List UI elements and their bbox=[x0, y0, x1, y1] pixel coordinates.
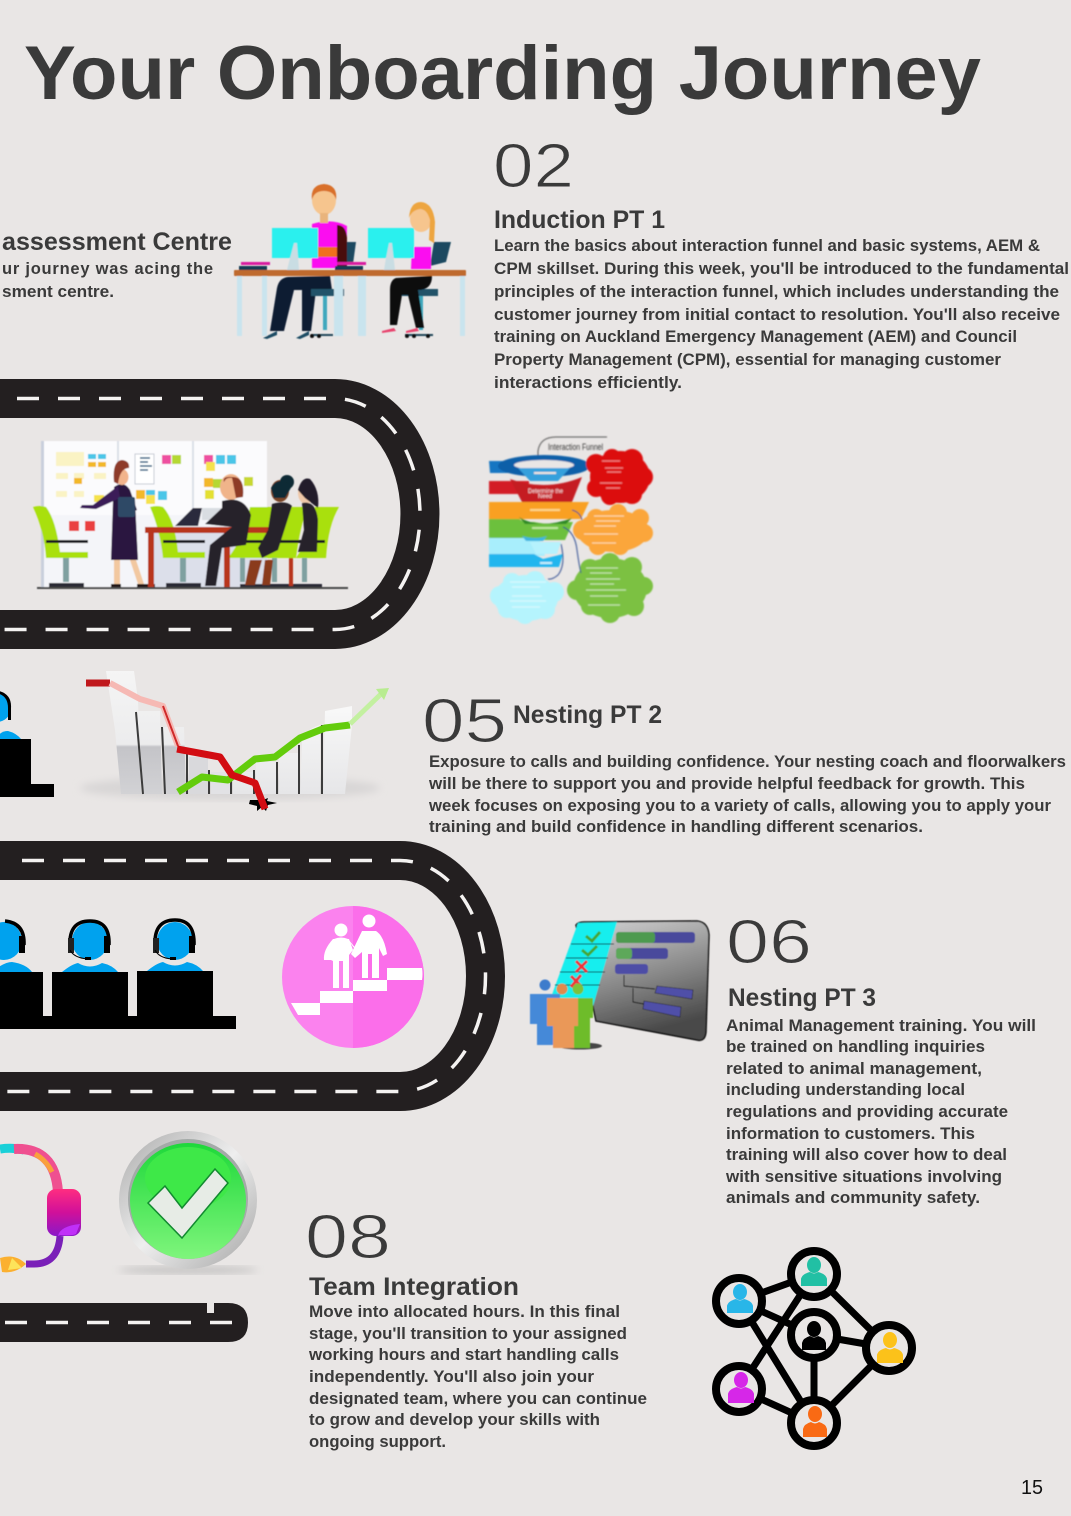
text block: induction PT 1: Learn the basics about interaction funnel and basic systems, AEM & bbox=[494, 236, 1040, 255]
text block: induction PT 1: training on Auckland Emergency Management (AEM) and Council bbox=[494, 327, 1017, 346]
floor line bbox=[37, 587, 348, 589]
funnel labels bbox=[528, 472, 564, 564]
green chairs bbox=[33, 506, 339, 558]
road: final stretch bbox=[0, 1303, 248, 1342]
shadow bbox=[80, 776, 380, 800]
text block: team integration: stage, you'll transition to your assigned bbox=[309, 1324, 627, 1343]
text block: nesting PT 2: Nesting PT 2 bbox=[513, 701, 662, 729]
desk top bbox=[234, 270, 466, 276]
green line bbox=[178, 688, 389, 792]
text block: team integration: independently. You'll also join your bbox=[309, 1367, 594, 1386]
agents row at desks bbox=[0, 920, 236, 1029]
text block: team integration: to grow and develop your skills with bbox=[309, 1410, 600, 1429]
icon: green check button bbox=[118, 1131, 258, 1274]
desks and monitors bbox=[0, 971, 236, 1029]
cloud: green bbox=[567, 553, 653, 623]
text block: induction PT 1: principles of the interaction funnel, which includes understanding the bbox=[494, 282, 1059, 301]
page number: 15 bbox=[1021, 1477, 1043, 1499]
road: second loop bbox=[0, 860, 486, 1092]
text block: nesting PT 3: related to animal management, bbox=[726, 1059, 982, 1078]
cloud: red bbox=[586, 449, 653, 505]
text block: induction PT 1: CPM skillset. During this week, you'll be introduced to the fundamental bbox=[494, 259, 1069, 278]
sticky notes bbox=[56, 452, 253, 531]
text block: nesting PT 3: Animal Management training. You will bbox=[726, 1016, 1036, 1035]
heading: nesting 3 number: 06 bbox=[726, 908, 812, 977]
text block: assessment centre: sment centre. bbox=[2, 282, 114, 301]
whiteboards bbox=[41, 441, 267, 587]
text block: induction PT 1: Induction PT 1 bbox=[494, 206, 665, 234]
text block: nesting PT 2 bbox=[428, 701, 1066, 836]
laptop bbox=[175, 508, 202, 526]
text block: nesting PT 3: Nesting PT 3 bbox=[728, 984, 876, 1012]
text block: assessment centre: assessment Centre bbox=[2, 228, 232, 256]
icon: people climbing steps bbox=[282, 906, 424, 1048]
cloud: orange bbox=[573, 504, 653, 555]
text block: induction PT 1: customer journey from initial contact to resolution. You'll also receive bbox=[494, 305, 1060, 324]
icon: gantt chart with checklist bbox=[530, 921, 709, 1050]
funnel labels: Determine the bbox=[528, 489, 564, 495]
text block: team integration: Move into allocated hours. In this final bbox=[309, 1302, 620, 1321]
people group bbox=[530, 980, 593, 1048]
checks and crosses bbox=[582, 932, 600, 955]
agent at left, first row bbox=[0, 690, 54, 797]
text block: induction PT 1: interactions efficiently. bbox=[494, 373, 682, 392]
text block: induction PT 1 bbox=[494, 206, 1069, 392]
bar gaps bbox=[136, 712, 322, 794]
bars bbox=[106, 671, 186, 794]
man bbox=[263, 184, 347, 339]
desk legs bbox=[237, 276, 465, 336]
funnel title: Interaction Funnel bbox=[548, 442, 603, 452]
chair backs bbox=[345, 242, 356, 264]
funnel title bbox=[538, 437, 607, 462]
books bbox=[239, 262, 366, 270]
road: first loop bbox=[0, 398, 420, 630]
funnel bands bbox=[489, 455, 590, 567]
agent 3 bbox=[147, 920, 203, 971]
text block: nesting PT 2: week focuses on exposing you to a variety of calls, allowing you to apply your bbox=[428, 796, 1051, 815]
illustration: interaction funnel bbox=[489, 437, 653, 624]
gantt bars bbox=[615, 932, 695, 1017]
cloud: light blue bbox=[490, 571, 564, 624]
illustration: two people at desks bbox=[234, 184, 466, 339]
illustration: meeting room bbox=[33, 441, 348, 589]
checklist bbox=[549, 922, 617, 1010]
text block: team integration: designated team, where you can continue bbox=[309, 1389, 647, 1408]
illustration: falling and rising bar chart bbox=[80, 671, 389, 811]
text block: nesting PT 3: information to customers. This bbox=[726, 1124, 975, 1143]
text block: assessment centre bbox=[2, 228, 232, 301]
text block: nesting PT 2: will be there to support you and provide helpful feedback for growth. This bbox=[428, 774, 1025, 793]
text block: nesting PT 3: animals and community safety. bbox=[726, 1188, 980, 1207]
text block: nesting PT 2: training and build confidence in handling different scenarios. bbox=[429, 817, 923, 836]
text block: nesting PT 3: with sensitive situations involving bbox=[725, 1167, 1002, 1186]
text block: team integration: working hours and start handling calls bbox=[308, 1345, 619, 1364]
text block: induction PT 1: Property Management (CPM), essential for managing customer bbox=[494, 350, 1001, 369]
text block: nesting PT 3: regulations and providing accurate bbox=[726, 1102, 1008, 1121]
icon: team network bbox=[716, 1251, 912, 1446]
heading: induction number: 02 bbox=[493, 132, 574, 201]
text block: team integration: Team Integration bbox=[309, 1273, 519, 1301]
agent 1 bbox=[0, 921, 32, 972]
agent 2 bbox=[62, 921, 118, 972]
seated colleagues bbox=[205, 474, 318, 586]
text block: team integration: ongoing support. bbox=[309, 1432, 446, 1451]
chair seats bbox=[311, 289, 344, 296]
text block: team integration bbox=[308, 1273, 647, 1451]
connector arrows bbox=[548, 510, 582, 579]
icon: colourful headset bbox=[0, 1148, 81, 1272]
chair bases bbox=[49, 558, 322, 588]
heading: team integration number: 08 bbox=[305, 1203, 391, 1272]
text block: nesting PT 2: Exposure to calls and building confidence. Your nesting coach and floorwalkers bbox=[429, 752, 1066, 771]
funnel labels: Need bbox=[538, 494, 552, 500]
text block: assessment centre: ur journey was acing the bbox=[2, 260, 213, 278]
text block: nesting PT 3: be trained on handling inquiries bbox=[726, 1037, 985, 1056]
text block: nesting PT 3: including understanding local bbox=[726, 1080, 965, 1099]
text block: nesting PT 3: training will also cover how to deal bbox=[726, 1145, 1007, 1164]
crash burst bbox=[249, 797, 277, 811]
table bbox=[145, 527, 293, 588]
red line bbox=[86, 683, 265, 809]
woman bbox=[382, 202, 435, 333]
title: Your Onboarding Journey bbox=[24, 31, 981, 116]
text block: nesting PT 3 bbox=[725, 984, 1036, 1207]
presenter bbox=[80, 460, 155, 588]
gantt panel bbox=[576, 921, 709, 1040]
shadow bbox=[558, 1042, 602, 1050]
monitors bbox=[272, 228, 414, 270]
heading: nesting 2 number: 05 bbox=[422, 687, 507, 756]
